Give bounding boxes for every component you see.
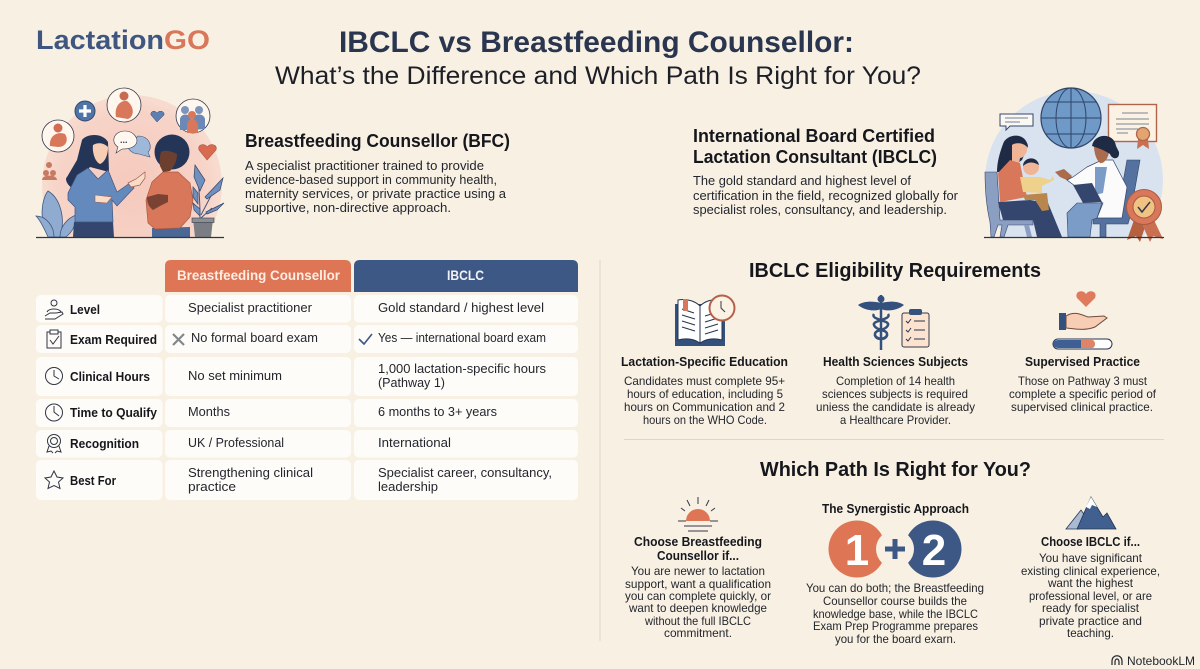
row: Best For	[36, 460, 578, 500]
row: Clinical Hours: (Pathway 1)	[378, 375, 445, 390]
row: Recognition	[36, 430, 578, 458]
row: Level: Gold standard / highest level	[378, 300, 544, 315]
icon: clipboard check	[47, 330, 61, 348]
path: The Synergistic Approach: Exam Prep Programme prepares	[813, 619, 978, 633]
row: Recognition: UK / Professional	[188, 435, 284, 450]
icon: 1 + 2 circles: 2	[922, 526, 946, 575]
text block: Breastfeeding Counsellor definition: evidence-based support in community health,	[245, 172, 497, 187]
logo: LactationGO: GO	[164, 25, 210, 55]
text block: IBCLC definition: certification in the field, recognized globally for	[693, 188, 959, 203]
row: Level: Level	[70, 303, 100, 317]
icon: sunrise	[678, 497, 718, 531]
row: Exam Required: Yes — international board exam	[378, 330, 546, 345]
icon: check	[359, 334, 372, 344]
icon: plant and pot right	[192, 165, 224, 237]
path: Choose Breastfeeding Counsellor: support, want a qualification	[625, 577, 771, 591]
icon: 1 + 2 circles	[828, 520, 962, 578]
path: Choose Breastfeeding Counsellor: You are newer to lactation	[631, 564, 765, 578]
text block: IBCLC definition: International Board Certified	[693, 126, 935, 146]
logo: LactationGO	[36, 25, 210, 55]
title	[275, 26, 921, 90]
requirement: Supervised Practice: complete a specific period of	[1009, 387, 1157, 401]
requirement: Health Sciences Subjects	[816, 295, 975, 427]
path: The Synergistic Approach: you for the board exarn.	[835, 632, 956, 646]
path: Choose IBCLC: teaching.	[1067, 626, 1114, 640]
requirement: Supervised Practice: Supervised Practice	[1025, 355, 1140, 369]
icon: medical plus	[75, 101, 95, 121]
text block: Breastfeeding Counsellor definition: maternity services, or private practice using a	[245, 186, 507, 201]
row: Clinical Hours: 1,000 lactation-specific hours	[378, 361, 546, 376]
icon: plant left	[36, 191, 76, 237]
icon: star	[45, 471, 63, 488]
row: Recognition: Recognition	[70, 437, 139, 451]
text block: Breastfeeding Counsellor definition: Breastfeeding Counsellor (BFC)	[245, 131, 510, 151]
text block: Breastfeeding Counsellor definition	[245, 131, 510, 215]
path: The Synergistic Approach	[806, 502, 984, 646]
header: IBCLC: IBCLC	[447, 267, 484, 283]
title: What’s the Difference and Which Path Is Right for You?	[275, 62, 921, 90]
path: The Synergistic Approach: Counsellor course builds the	[823, 594, 967, 608]
icon: open book with clock	[675, 296, 734, 346]
icon: breastfeeding badge	[107, 88, 141, 122]
requirement: Supervised Practice	[1009, 291, 1157, 414]
requirement: Lactation-Specific Education: Candidates must complete 95+	[624, 374, 785, 388]
icon: award	[47, 434, 61, 453]
icon: mother and baby badge	[42, 120, 74, 152]
icon: heart orange	[199, 145, 216, 160]
heading: Which Path Is Right for You?: Which Path Is Right for You?	[760, 459, 1031, 481]
requirement: Health Sciences Subjects: a Healthcare Provider.	[840, 413, 951, 427]
text block: Breastfeeding Counsellor definition: supportive, non-directive approach.	[245, 200, 451, 215]
requirement: Health Sciences Subjects: Completion of 14 health	[836, 374, 955, 388]
row: Clinical Hours	[36, 357, 578, 396]
row: Time to Qualify: Time to Qualify	[70, 406, 157, 420]
requirement: Lactation-Specific Education: hours of education, including 5	[627, 387, 783, 401]
row: Exam Required: Exam Required	[70, 333, 157, 347]
heading: IBCLC Eligibility Requirements: IBCLC Eligibility Requirements	[749, 260, 1041, 282]
icon: mother and baby on chair	[985, 136, 1062, 237]
requirement: Lactation-Specific Education: Lactation-Specific Education	[621, 355, 788, 369]
row: Best For: Best For	[70, 474, 116, 488]
icon: speech bubble	[1000, 114, 1033, 130]
requirement: Supervised Practice: supervised clinical practice.	[1011, 400, 1153, 414]
title: IBCLC vs Breastfeeding Counsellor:	[339, 26, 854, 59]
path: Choose Breastfeeding Counsellor: Choose Breastfeeding	[634, 535, 762, 549]
icon: clock	[46, 368, 62, 384]
comparison table	[36, 260, 578, 500]
icon: hand with heart and progress bar	[1053, 291, 1112, 349]
path: Choose Breastfeeding Counsellor: Counsellor if...	[657, 549, 739, 563]
icon: caduceus and checklist	[858, 295, 929, 350]
row: Clinical Hours: No set minimum	[188, 368, 282, 383]
icon: small group	[42, 162, 57, 180]
path: Choose IBCLC: ready for specialist	[1042, 601, 1140, 615]
row: Best For: Strengthening clinical	[188, 465, 313, 480]
path: Choose Breastfeeding Counsellor: commitment.	[664, 626, 732, 640]
path: Choose IBCLC: want the highest	[1047, 576, 1134, 590]
requirement: Lactation-Specific Education: hours on Communication and 2	[624, 400, 785, 414]
header: Breastfeeding Counsellor: Breastfeeding Counsellor	[177, 268, 341, 283]
row: Clinical Hours: Clinical Hours	[70, 370, 150, 384]
path: Choose IBCLC: Choose IBCLC if...	[1041, 535, 1140, 549]
path: Choose IBCLC: professional level, or are	[1029, 589, 1152, 603]
row: Level: Specialist practitioner	[188, 300, 313, 315]
icon: pregnant woman figure	[146, 134, 193, 237]
row: Exam Required: No formal board exam	[191, 330, 318, 345]
logo: LactationGO: Lactation	[36, 25, 164, 55]
row: Recognition: International	[378, 435, 451, 450]
icon: clock	[46, 404, 62, 421]
icon: speech bubbles: ...	[120, 135, 128, 145]
icon: hand with person	[45, 300, 63, 319]
requirement: Health Sciences Subjects: Health Sciences Subjects	[823, 355, 968, 369]
requirement: Lactation-Specific Education	[621, 296, 788, 427]
icon: 1 + 2 circles: 1	[845, 526, 869, 575]
text block: IBCLC definition: The gold standard and highest level of	[693, 173, 911, 188]
requirement: Health Sciences Subjects: sciences subjects is required	[822, 387, 968, 401]
icon: family badge	[176, 99, 210, 133]
row: Level	[36, 295, 578, 322]
icon: certificate	[1108, 104, 1156, 149]
icon: globe	[1041, 88, 1101, 148]
text block: IBCLC definition	[693, 126, 959, 217]
path: Choose Breastfeeding Counsellor: want to deepen knowledge	[628, 601, 767, 615]
icon: rosette seal	[1126, 190, 1163, 242]
icon: consultant on chair	[1055, 136, 1140, 237]
text block: IBCLC definition: specialist roles, consultancy, and leadership.	[693, 202, 947, 217]
row: Best For: leadership	[378, 479, 438, 494]
text block: IBCLC definition: Lactation Consultant (IBCLC)	[693, 147, 937, 167]
requirement: Lactation-Specific Education: hours on the WHO Code.	[643, 413, 767, 427]
icon: heart blue	[151, 111, 164, 122]
icon: cross	[173, 334, 184, 345]
row: Best For: practice	[188, 479, 236, 494]
path: The Synergistic Approach: knowledge base, while the IBCLC	[813, 607, 978, 621]
illustration: counsellor talking with pregnant woman	[35, 88, 224, 238]
icon: speech bubbles	[114, 131, 150, 157]
row: Exam Required	[36, 325, 578, 353]
badge: NotebookLM: NotebookLM	[1127, 654, 1195, 668]
path: Choose IBCLC: private practice and	[1039, 614, 1142, 628]
illustration: IBCLC consultant with mother and baby	[984, 87, 1164, 242]
requirement: Health Sciences Subjects: uniess the candidate is already	[816, 400, 975, 414]
path: Choose Breastfeeding Counsellor: you can complete quickly, or	[625, 589, 771, 603]
row: Time to Qualify: 6 months to 3+ years	[378, 404, 497, 419]
path: Choose Breastfeeding Counsellor: without the full IBCLC	[644, 614, 751, 628]
icon: counsellor figure	[66, 135, 145, 237]
path: Choose IBCLC: You have significant	[1039, 551, 1143, 565]
row: Time to Qualify: Months	[188, 404, 230, 419]
path: Choose IBCLC: existing clinical experience,	[1021, 564, 1160, 578]
row: Time to Qualify	[36, 399, 578, 427]
requirement: Supervised Practice: Those on Pathway 3 must	[1018, 374, 1148, 388]
row: Best For: Specialist career, consultancy,	[378, 465, 552, 480]
icon: mountains	[1066, 497, 1116, 529]
header: IBCLC	[354, 260, 578, 292]
path: The Synergistic Approach: You can do both; the Breastfeeding	[806, 581, 984, 595]
path: Choose Breastfeeding Counsellor	[625, 497, 771, 640]
text block: Breastfeeding Counsellor definition: A specialist practitioner trained to provide	[245, 158, 484, 173]
path: The Synergistic Approach: The Synergistic Approach	[822, 502, 969, 516]
header: Breastfeeding Counsellor	[165, 260, 351, 292]
path: Choose IBCLC	[1021, 497, 1160, 640]
